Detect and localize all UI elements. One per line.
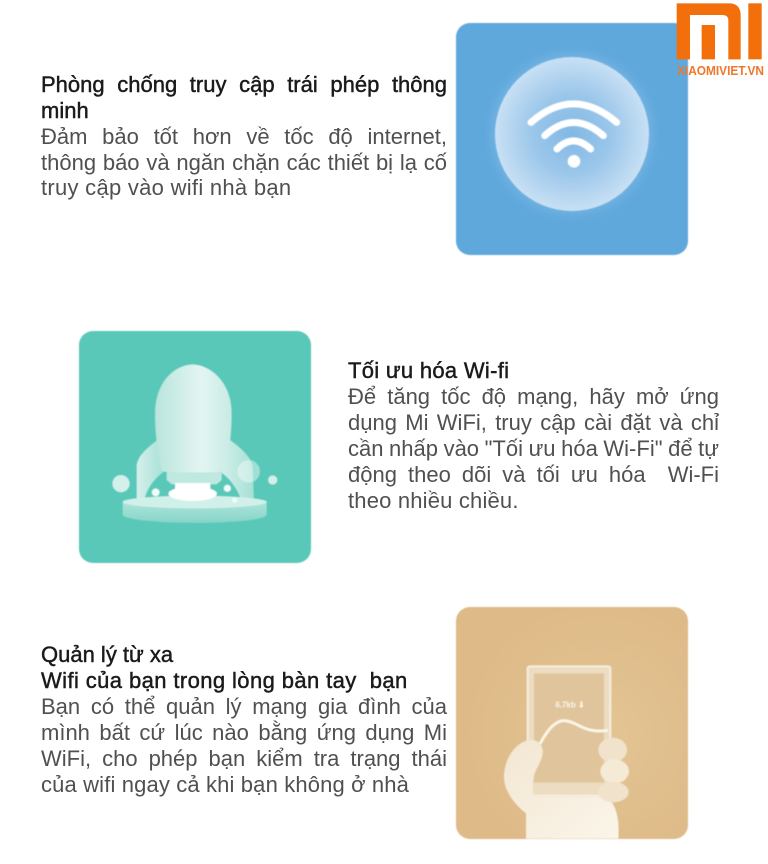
text block: remote management — [40, 642, 447, 797]
body: access protection: Đảm bảo tốt hơn về tốc độ internet, — [41, 124, 447, 149]
text block: smart access protection: minh — [41, 98, 89, 123]
text block: smart access protection — [41, 72, 447, 200]
text block: remote management: Wifi của bạn trong lòng bàn tay bạn — [41, 668, 408, 693]
icon: wifi signal — [531, 104, 617, 168]
logo: Mi — [677, 3, 764, 78]
heading: access protection: Phòng chống truy cập trái phép thông — [41, 72, 447, 97]
body: wifi optimisation: Để tăng tốc độ mạng, hãy mở ứng — [348, 384, 719, 409]
text block: wifi optimisation — [348, 358, 719, 513]
text block: smart access protection: thông báo và ngăn chặn các thiết bị lạ cố — [41, 150, 447, 175]
panel: rocket icon — [79, 331, 311, 563]
body: remote management: Bạn có thể quản lý mạng gia đình của — [41, 694, 447, 719]
text block: remote management: mình bất cứ lúc nào bằng ứng dụng Mi — [41, 720, 447, 745]
text block: remote management: WiFi, cho phép bạn kiểm tra trạng thái — [41, 746, 447, 771]
panel: wifi icon — [456, 23, 688, 255]
heading: remote management: Quản lý từ xa — [41, 642, 173, 667]
text block: wifi optimisation: dụng Mi WiFi, truy cập cài đặt và chỉ — [348, 410, 719, 435]
heading: wifi optimisation: Tối ưu hóa Wi-fi — [348, 358, 509, 383]
text block: wifi optimisation: cần nhấp vào "Tối ưu hóa Wi-Fi" để tự — [348, 436, 719, 461]
icon: rocket on platform — [112, 364, 277, 523]
text block: smart access protection: truy cập vào wifi nhà bạn — [41, 175, 291, 200]
speed label: 6.7kb ⬇ — [555, 700, 585, 709]
panel: phone in hand icon — [456, 607, 688, 839]
icon: hand holding phone — [504, 666, 629, 839]
text block: wifi optimisation: theo nhiều chiều. — [348, 488, 519, 513]
text block: remote management: của wifi ngay cả khi bạn không ở nhà — [41, 772, 409, 797]
text block: wifi optimisation: động theo dõi và tối ưu hóa Wi-Fi — [348, 462, 719, 487]
